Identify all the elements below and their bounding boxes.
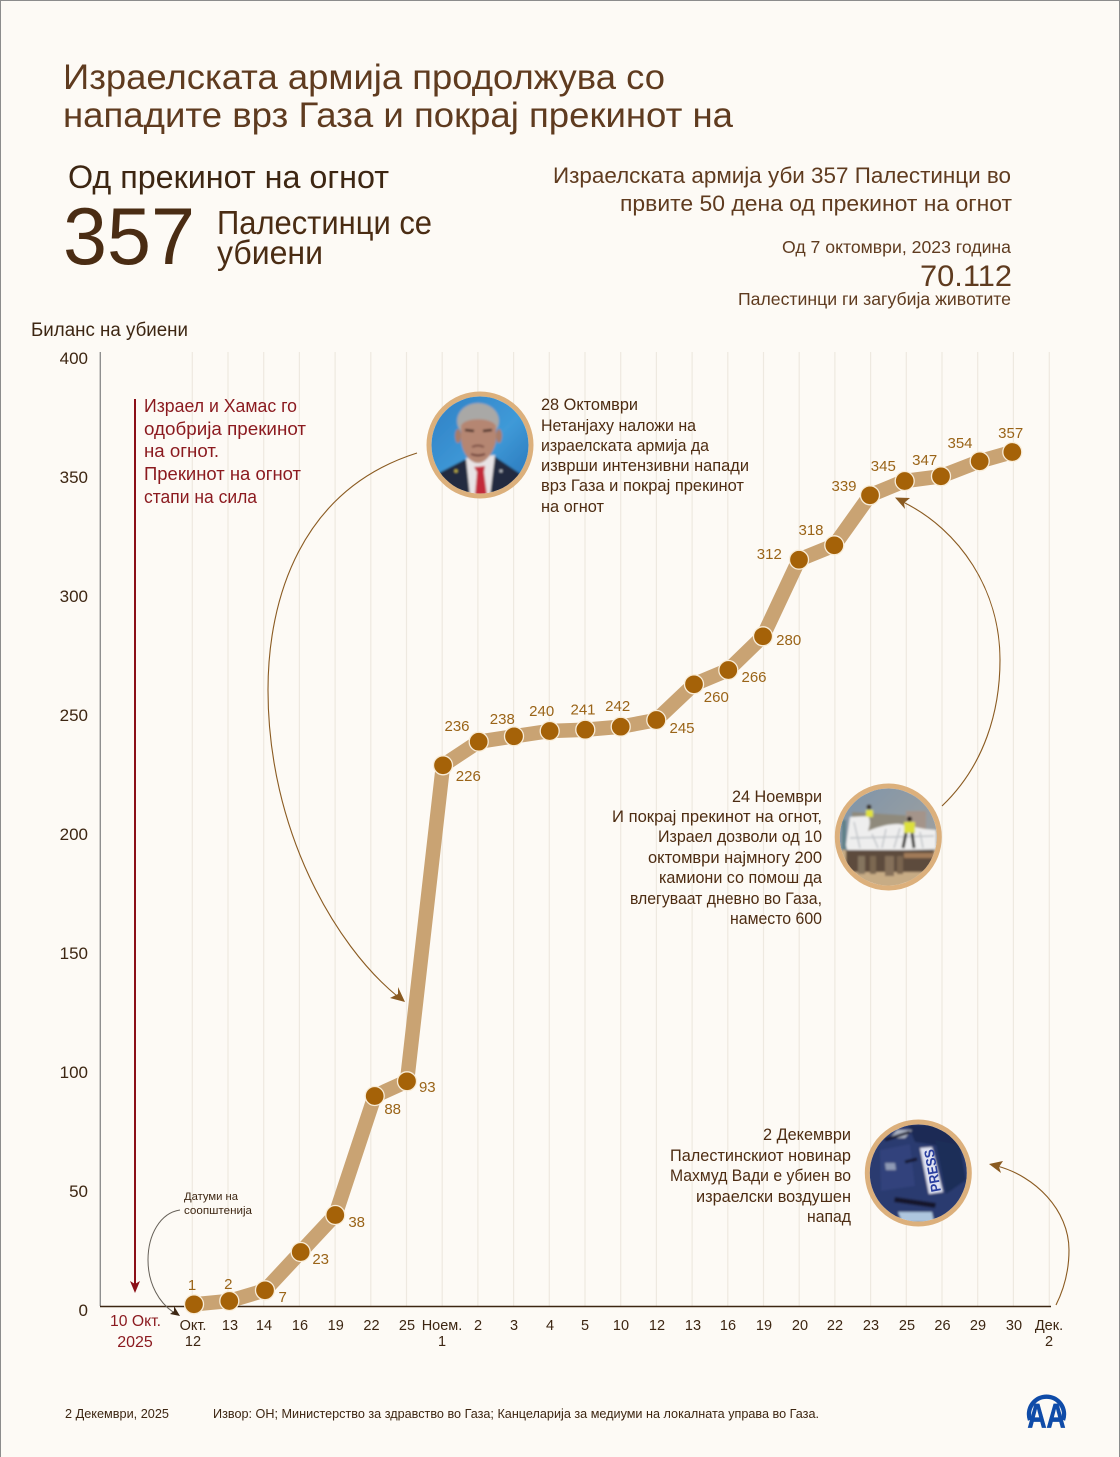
headline stat: 357 killed: Палестинци се xyxy=(217,204,432,241)
data value labels: 236 xyxy=(444,718,470,735)
data value labels: 347 xyxy=(912,452,937,469)
x axis: 12 xyxy=(185,1334,201,1350)
data value labels: 245 xyxy=(669,720,695,737)
footer source: Извор: ОН; Министерство за здравство во Газа; Канцеларија за медиуми на локалната управа во Газа. xyxy=(213,1407,819,1421)
ceasefire note xyxy=(144,395,307,507)
x axis: 29 xyxy=(970,1318,986,1334)
data value labels: 266 xyxy=(741,669,767,686)
annotation: 24 November: влегуваат дневно во Газа, xyxy=(630,890,822,908)
y axis: 200 xyxy=(60,825,88,844)
data value labels: 240 xyxy=(529,703,554,720)
headline stat: 357 killed xyxy=(63,159,432,282)
y axis: 0 xyxy=(79,1301,88,1320)
x axis: 20 xyxy=(792,1318,808,1334)
x axis: Ноем. xyxy=(422,1318,462,1334)
data value labels: 280 xyxy=(776,632,801,649)
annotation: 2 December xyxy=(670,1126,851,1226)
y axis xyxy=(60,349,100,1320)
ceasefire note: Израел и Хамас го xyxy=(144,395,297,416)
annotation: 28 October: 28 Октомври xyxy=(541,396,638,414)
data value labels: 318 xyxy=(798,522,824,539)
arrow: announcement dates xyxy=(148,1210,180,1316)
y axis: 350 xyxy=(60,468,88,487)
summary text block: Од 7 октомври, 2023 година xyxy=(782,237,1011,257)
x axis: 22 xyxy=(363,1318,380,1334)
data value labels: 339 xyxy=(831,478,857,495)
x axis: 13 xyxy=(222,1318,238,1334)
annotation: 24 November: наместо 600 xyxy=(730,910,822,928)
annotation: 2 December: Махмуд Вади е убиен во xyxy=(670,1167,851,1185)
annotation: 2 December: напад xyxy=(807,1208,851,1226)
data value labels: 23 xyxy=(312,1251,329,1268)
y axis: 150 xyxy=(60,944,88,963)
annotation: 24 November: камиони со помош да xyxy=(659,869,823,887)
data value labels: 354 xyxy=(947,435,973,452)
y axis: 400 xyxy=(60,349,88,368)
y axis: 250 xyxy=(60,706,88,725)
note: announcement dates: соопштенија xyxy=(184,1205,253,1217)
title: Израелската армија продолжува со xyxy=(63,58,665,97)
data points xyxy=(184,442,1022,1314)
x axis: 4 xyxy=(546,1318,554,1334)
annotation: 24 November: Израел дозволи од 10 xyxy=(658,828,822,846)
data value labels: 312 xyxy=(757,546,782,563)
data value labels: 2 xyxy=(224,1276,232,1293)
annotation: 28 October: Нетанјаху наложи на xyxy=(541,417,697,435)
data value labels: 238 xyxy=(490,711,515,728)
ceasefire note: на огнот. xyxy=(144,440,219,461)
headline stat: 357 killed: 357 xyxy=(63,192,195,282)
note: announcement dates: Датуми на xyxy=(184,1191,239,1203)
x axis: 30 xyxy=(1006,1318,1022,1334)
x axis: Окт. xyxy=(180,1318,206,1334)
x axis: 22 xyxy=(827,1318,843,1334)
summary text block xyxy=(553,163,1012,309)
x axis: 16 xyxy=(292,1318,308,1334)
summary text block: Израелската армија уби 357 Палестинци во xyxy=(553,163,1011,188)
annotation: 28 October: изврши интензивни напади xyxy=(541,457,749,475)
data value labels: 7 xyxy=(279,1289,287,1306)
photo: Netanyahu xyxy=(429,394,531,500)
annotation: 28 October: израелската армија да xyxy=(541,437,710,455)
x axis: 3 xyxy=(510,1318,518,1334)
x axis: 26 xyxy=(934,1318,951,1334)
x axis: 13 xyxy=(685,1318,701,1334)
y axis title: Биланс на убиени xyxy=(31,320,188,341)
summary text block: 70.112 xyxy=(920,260,1012,293)
data value labels xyxy=(188,425,1023,1306)
data value labels: 1 xyxy=(188,1277,196,1294)
ceasefire note: стапи на сила xyxy=(144,486,258,507)
data value labels: 345 xyxy=(871,458,896,475)
photo: press vest xyxy=(867,1122,970,1225)
ceasefire date label: 10 Окт. xyxy=(110,1313,161,1330)
y axis: 300 xyxy=(60,587,88,606)
annotation: 2 December: израелски воздушен xyxy=(696,1188,851,1206)
note: announcement dates xyxy=(184,1191,253,1217)
data value labels: 242 xyxy=(605,698,630,715)
summary text block: првите 50 дена од прекинот на огнот xyxy=(620,191,1012,216)
arrow: 28 October callout xyxy=(268,453,417,1002)
data value labels: 357 xyxy=(998,425,1023,442)
y axis: 100 xyxy=(60,1063,88,1082)
x axis: 10 xyxy=(613,1318,629,1334)
summary text block: Палестинци ги загубија животите xyxy=(738,289,1011,309)
annotation: 24 November: октомври најмногу 200 xyxy=(648,849,822,867)
annotation: 28 October: на огнот xyxy=(541,498,604,516)
ceasefire date label xyxy=(110,1313,161,1351)
y axis: 50 xyxy=(69,1182,88,1201)
headline stat: 357 killed: Од прекинот на огнот xyxy=(68,159,389,195)
x axis: 14 xyxy=(256,1318,272,1334)
photo: aid truck xyxy=(837,786,940,888)
ceasefire date label: 2025 xyxy=(117,1334,153,1351)
x axis: 1 xyxy=(438,1334,446,1350)
x axis: Дек. xyxy=(1035,1318,1063,1334)
x axis: 2 xyxy=(1045,1334,1053,1350)
footer date: 2 Декември, 2025 xyxy=(65,1407,169,1421)
title: нападите врз Газа и покрај прекинот на xyxy=(63,96,734,135)
x axis: 5 xyxy=(581,1318,589,1334)
ceasefire red arrow xyxy=(130,399,140,1293)
photo: press vest: PRESS xyxy=(921,1148,944,1193)
annotation: 24 November xyxy=(612,788,823,928)
data value labels: 241 xyxy=(570,702,596,718)
annotation: 2 December: Палестинскиот новинар xyxy=(670,1147,851,1165)
x axis: 25 xyxy=(899,1318,915,1334)
ceasefire note: одобрија прекинот xyxy=(144,418,307,439)
annotation: 28 October: врз Газа и покрај прекинот xyxy=(541,477,744,495)
x axis: 16 xyxy=(720,1318,736,1334)
annotation: 28 October xyxy=(541,396,749,516)
headline stat: 357 killed: убиени xyxy=(217,234,323,271)
arrow: 2 December callout xyxy=(989,1161,1069,1305)
logo: AA: AA xyxy=(1028,1398,1066,1436)
data value labels: 93 xyxy=(419,1079,436,1096)
annotation: 2 December: 2 Декември xyxy=(763,1126,851,1144)
arrow: 24 November callout xyxy=(895,498,1000,806)
annotation: 24 November: 24 Ноември xyxy=(732,788,822,806)
title xyxy=(63,58,734,135)
data value labels: 226 xyxy=(456,768,481,785)
ceasefire note: Прекинот на огнот xyxy=(144,463,302,484)
x axis: 2 xyxy=(474,1318,482,1334)
x axis: 25 xyxy=(399,1318,415,1334)
data value labels: 88 xyxy=(384,1101,401,1118)
x axis: 19 xyxy=(756,1318,772,1334)
x axis: 12 xyxy=(649,1318,665,1334)
data line xyxy=(194,452,1012,1304)
data value labels: 38 xyxy=(348,1214,365,1231)
x axis xyxy=(100,1306,1063,1350)
x axis: 23 xyxy=(863,1318,879,1334)
chart xyxy=(60,349,1063,1350)
x axis: 19 xyxy=(328,1318,344,1334)
data value labels: 260 xyxy=(704,689,729,706)
annotation: 24 November: И покрај прекинот на огнот, xyxy=(612,808,822,826)
